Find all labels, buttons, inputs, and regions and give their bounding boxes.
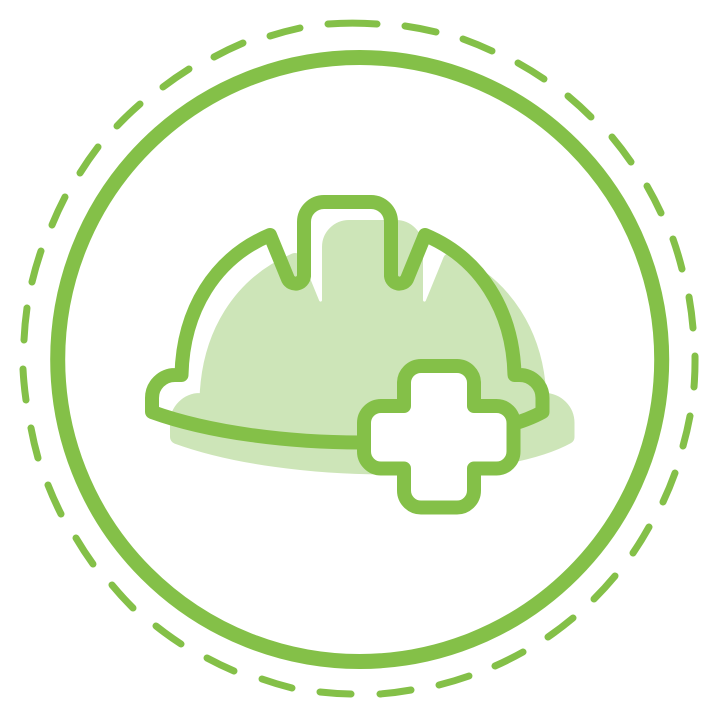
hard hat light offset fill <box>177 227 568 468</box>
hard hat outline <box>152 202 542 442</box>
medical cross <box>364 366 514 508</box>
solid inner ring <box>58 58 662 662</box>
